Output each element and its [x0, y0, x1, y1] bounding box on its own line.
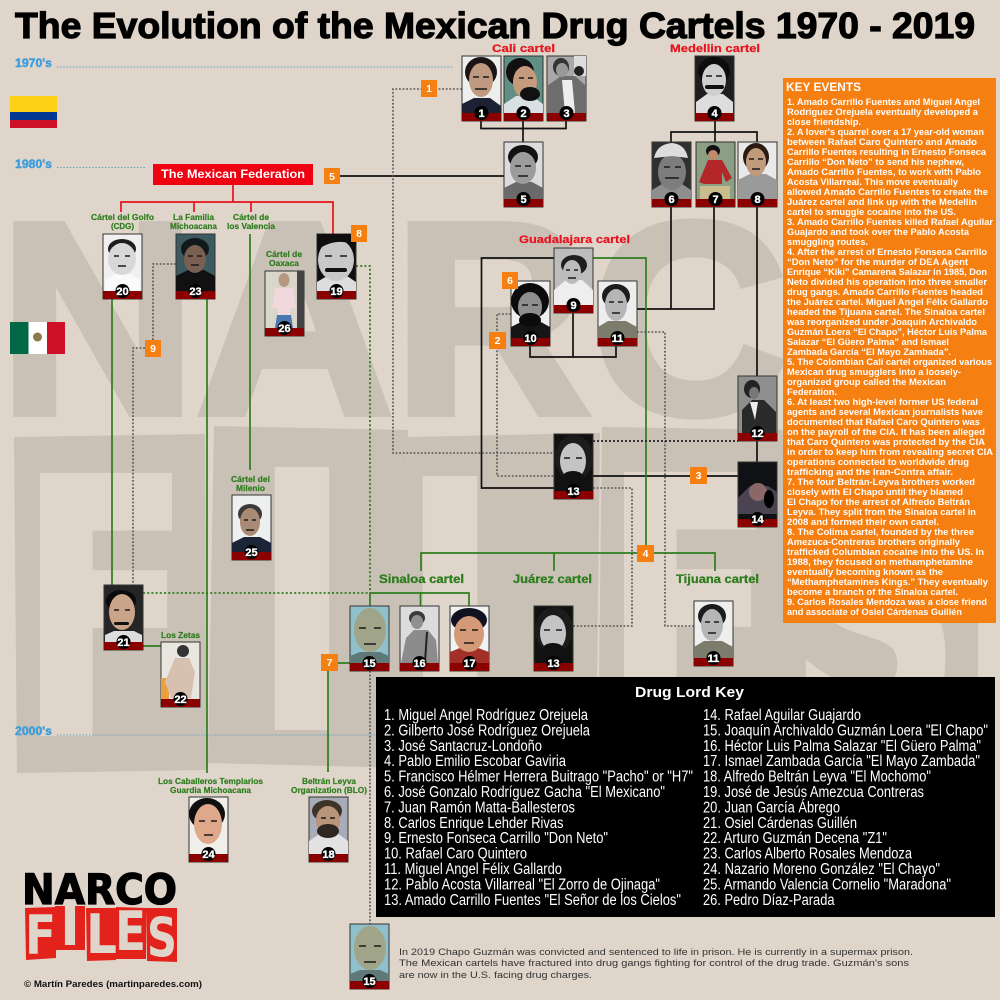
label: La Familia Michoacana: Michoacana — [170, 221, 217, 231]
portrait 7 — [696, 142, 735, 207]
panel: key events: on the payroll of the CIA. It has been alleged — [787, 427, 985, 437]
connector lines: green solid — [112, 234, 715, 773]
panel: drug lord key: 6. José Gonzalo Rodríguez Gacha "El Mexicano" — [384, 784, 665, 801]
portrait 6 — [652, 142, 691, 207]
portrait 17 — [450, 606, 489, 671]
watermark: NARCO FILES: NARCO — [0, 166, 1000, 471]
portrait 12: 12 — [751, 428, 764, 440]
marker 7 — [321, 654, 338, 671]
panel: key events: and associate of Osiel Cárdenas Guillén — [787, 607, 962, 617]
panel: key events: Carrillo Fuentes resulting in Ernesto Fonseca — [787, 147, 986, 157]
portrait 23 — [176, 234, 215, 299]
label: Cartel del Milenio: Milenio — [236, 483, 265, 493]
panel: key events: 8. The Colima cartel, founded by the three — [787, 527, 974, 537]
heading: Tijuana cartel: Tijuana cartel — [676, 574, 759, 586]
label: Cartel de los Valencia: Cártel de — [233, 212, 269, 222]
marker 5 — [324, 168, 340, 184]
panel: drug lord key: 8. Carlos Enrique Lehder Rivas — [384, 815, 564, 832]
logo: NARCO FILES: NARCO — [22, 865, 177, 914]
marker 6: 6 — [507, 275, 513, 287]
portrait 12 — [738, 376, 777, 441]
panel: key events: documented that Rafael Caro Quintero was — [787, 417, 980, 427]
portrait 22: 22 — [174, 694, 187, 706]
marker 1 — [421, 80, 437, 97]
portrait 3 — [547, 56, 586, 121]
panel: key events: Guajardo and took over the Pablo Acosta — [787, 227, 969, 237]
label: Cartel del Milenio — [231, 474, 270, 493]
panel: key events: 4. After the arrest of Ernesto Fonseca Carrillo — [787, 247, 988, 257]
label: Cartel del Golfo: (CDG) — [111, 221, 134, 231]
logo: NARCO FILES: E — [115, 900, 146, 963]
portrait 8 — [738, 142, 777, 207]
panel: drug lord key: 14. Rafael Aguilar Guajardo — [703, 707, 861, 724]
portrait 14: 14 — [751, 514, 764, 526]
label: Beltran Leyva Organization: Organization (BLO) — [291, 785, 367, 795]
portrait 13: 13 — [567, 486, 580, 498]
portrait 16: 16 — [413, 658, 426, 670]
portrait 18 — [309, 797, 348, 862]
panel: drug lord key: 3. José Santacruz-Londoño — [384, 738, 542, 755]
portrait 11 (Tijuana): 11 — [708, 653, 719, 665]
panel: drug lord key: 1. Miguel Angel Rodríguez Orejuela — [384, 707, 588, 724]
label: Cartel de los Valencia — [227, 212, 275, 231]
panel: drug lord key: 4. Pablo Emilio Escobar Gaviria — [384, 753, 566, 770]
portrait 1 — [462, 56, 501, 121]
portrait 20 — [103, 234, 142, 299]
panel: key events: Amado Carrillo Fuentes, to work with Pablo — [787, 167, 982, 177]
credit: © Martín Paredes (martinparedes.com) — [24, 979, 202, 990]
portrait 14 — [738, 462, 777, 527]
panel: key events: KEY EVENTS — [786, 82, 861, 94]
watermark: NARCO FILES: F — [20, 407, 190, 815]
panel: key events: trafficking and the Iran-Contra affair. — [787, 467, 953, 477]
panel: key events: trafficked Columbian cocaine into the US. In — [787, 547, 984, 557]
portrait 22 — [161, 642, 200, 707]
logo: NARCO FILES — [22, 865, 177, 969]
timeline: 1980's — [15, 159, 145, 171]
portrait 19 — [317, 234, 356, 299]
panel: key events: Enrique “Kiki” Camarena Salazar in 1985, Don — [787, 267, 987, 277]
portrait 26: 26 — [278, 323, 291, 335]
panel: key events: Federation. — [787, 387, 837, 397]
The Mexican Federation box: The Mexican Federation — [161, 169, 305, 181]
title: The Evolution of the Mexican Drug Cartels 1970 - 2019 — [15, 5, 975, 46]
panel: key events: closely with El Chapo until they blamed — [787, 487, 963, 497]
heading: Medellin cartel: Medellin cartel — [670, 43, 760, 55]
portrait 23: 23 — [189, 286, 202, 298]
panel: key events: organized group called the Mexican — [787, 377, 946, 387]
panel: drug lord key: 25. Armando Valencia Cornelio "Maradona" — [703, 876, 951, 893]
marker 2: 2 — [495, 335, 501, 347]
marker 9 — [145, 340, 161, 357]
panel: key events: Mexican drug smugglers into a loosely- — [787, 367, 961, 377]
connector lines: red federation tree — [121, 185, 333, 234]
connector lines: dotted — [133, 89, 738, 924]
portrait 15: 15 — [363, 658, 376, 670]
text block: 2019 note: are now in the U.S. facing drug charges. — [399, 970, 592, 980]
watermark: NARCO FILES — [0, 166, 1000, 818]
panel: key events: was reorganized under Joaquín Archivaldo — [786, 317, 978, 327]
text block: 2019 note — [399, 947, 913, 980]
watermark: NARCO FILES: I — [254, 401, 350, 809]
portrait 10 — [511, 281, 550, 346]
icon: Colombian flag — [10, 96, 57, 128]
The Mexican Federation box — [153, 164, 313, 185]
panel: key events — [783, 78, 996, 623]
panel: drug lord key: 23. Carlos Alberto Rosales Mendoza — [703, 846, 912, 863]
connector lines: black solid — [340, 121, 757, 488]
panel: key events: between Rafael Caro Quintero and Amado — [787, 137, 978, 147]
portrait 20: 20 — [116, 286, 129, 298]
label: Los Caballeros Templarios — [158, 776, 263, 795]
label: La Familia Michoacana: La Familia — [173, 212, 214, 222]
portrait 19: 19 — [330, 286, 343, 298]
portrait 18: 18 — [322, 849, 335, 861]
portrait 5: 5 — [520, 194, 527, 206]
label: Cartel del Golfo: Cártel del Golfo — [91, 212, 154, 222]
panel: drug lord key: 19. José de Jesús Amezcua Contreras — [703, 784, 924, 801]
panel: key events: 1. Amado Carrillo Fuentes and Miguel Angel — [787, 97, 980, 107]
label: Cartel del Milenio: Cártel del — [231, 474, 270, 484]
heading: Juarez cartel: Juárez cartel — [513, 574, 592, 586]
icon: Mexican flag — [10, 322, 65, 354]
portrait 15 (2019): 15 — [363, 976, 376, 988]
marker 4 — [637, 545, 654, 562]
panel: key events: Juárez cartel and link up with the Medellin — [787, 197, 977, 207]
panel: key events: 2008 and formed their own cartel. — [787, 517, 939, 527]
panel: key events: 7. The four Beltrán-Leyva brothers worked — [787, 477, 975, 487]
portrait 2 — [504, 56, 543, 121]
logo: NARCO FILES: I — [60, 895, 80, 958]
label: Cartel de Oaxaca: Oaxaca — [269, 258, 299, 268]
portrait 9 — [554, 248, 593, 313]
panel: drug lord key: 12. Pablo Acosta Villarreal "El Zorro de Ojinaga" — [384, 876, 660, 893]
label: La Familia Michoacana — [170, 212, 217, 231]
portrait 3: 3 — [563, 108, 570, 120]
portrait 8: 8 — [754, 194, 761, 206]
panel: key events: close friendship. — [787, 117, 861, 127]
panel: drug lord key: 18. Alfredo Beltrán Leyva "El Mochomo" — [703, 769, 931, 786]
logo: NARCO FILES: S — [147, 906, 177, 969]
text block: 2019 note: In 2019 Chapo Guzmán was convicted and sentenced to life in prison. He is currently in a supermax prison. — [399, 947, 913, 957]
watermark: NARCO FILES: L — [402, 410, 567, 818]
panel: drug lord key: 24. Nazario Moreno González "El Chayo" — [703, 861, 940, 878]
label: Beltran Leyva Organization — [291, 776, 367, 795]
portrait 10: 10 — [524, 333, 537, 345]
marker 6 — [502, 272, 518, 289]
portrait 1: 1 — [478, 108, 485, 120]
panel: key events: eventually becoming known as the — [787, 567, 943, 577]
portrait 26 — [265, 271, 304, 336]
heading: Cali cartel: Cali cartel — [492, 43, 555, 55]
panel: key events: 9. Carlos Rosales Mendoza was a close friend — [787, 597, 987, 607]
panel: drug lord key: 20. Juan García Ábrego — [703, 799, 840, 816]
panel: key events: 3. Amado Carrillo Fuentes killed Rafael Aguilar — [787, 217, 994, 227]
panel: key events: Zambada García “El Mayo Zambada”. — [787, 347, 951, 357]
timeline: 2000's: 2000's — [15, 726, 52, 738]
panel: key events: Acosta Villarreal. This move eventually — [787, 177, 958, 187]
panel: key events: 6. At least two high-level former US federal — [787, 397, 978, 407]
panel: key events: 2. A lover's quarrel over a 17 year-old woman — [787, 127, 984, 137]
heading: Sinaloa cartel: Sinaloa cartel — [379, 574, 464, 586]
portrait 15 (2019) — [350, 924, 389, 989]
portrait 2: 2 — [520, 108, 527, 120]
marker 9: 9 — [150, 343, 156, 355]
panel: key events: operations connected to worldwide drug — [787, 457, 969, 467]
marker 2 — [489, 332, 506, 349]
portrait 24: 24 — [202, 849, 215, 861]
label: Beltran Leyva Organization: Beltrán Leyva — [302, 776, 356, 786]
portrait 11: 11 — [612, 333, 623, 345]
label: Cartel de los Valencia: los Valencia — [227, 221, 275, 231]
label: Los Caballeros Templarios: Guardia Michoacana — [170, 785, 251, 795]
portrait 24 — [189, 797, 228, 862]
panel: key events: agents and several Mexican journalists have — [787, 407, 983, 417]
portrait 6: 6 — [668, 194, 675, 206]
panel: key events: become a branch of the Sinaloa cartel. — [787, 587, 958, 597]
panel: key events: that Caro Quintero was protected by the CIA — [787, 437, 986, 447]
timeline: 1980's: 1980's — [15, 159, 52, 171]
portrait 11 — [598, 281, 637, 346]
marker 3 — [690, 467, 707, 484]
panel: drug lord key: 10. Rafael Caro Quintero — [384, 846, 527, 863]
panel: drug lord key: 9. Ernesto Fonseca Carrillo "Don Neto" — [384, 830, 608, 847]
logo: NARCO FILES: F — [25, 904, 56, 967]
panel: drug lord key: 7. Juan Ramón Matta-Ballesteros — [384, 799, 575, 816]
text block: 2019 note: The Mexican cartels have fractured into drug gangs fighting for control of the drug trade. Guzmán's sons — [399, 958, 910, 968]
portrait 21 — [104, 585, 143, 650]
label: Cartel de Oaxaca: Cártel de — [266, 249, 302, 259]
panel: drug lord key: 11. Miguel Angel Félix Gallardo — [384, 861, 562, 878]
portrait 4: 4 — [711, 108, 718, 120]
panel: drug lord key: 5. Francisco Hélmer Herrera Buitrago "Pacho" or "H7" — [384, 769, 693, 786]
panel: key events: 1988, they focused on methamphetamine — [787, 557, 973, 567]
panel: key events: the Juárez cartel. Miguel Angel Félix Gallardo — [787, 297, 989, 307]
panel: key events: “Don Neto” for the murder of DEA Agent — [787, 257, 968, 267]
panel: key events: smuggling routes. — [787, 237, 868, 247]
panel: key events: cartel to smuggle cocaine into the US. — [787, 207, 956, 217]
portrait 9: 9 — [570, 300, 577, 312]
portrait 7: 7 — [712, 194, 719, 206]
portrait 5 — [504, 142, 543, 207]
timeline: 1970's: 1970's — [15, 58, 52, 70]
marker 8 — [351, 225, 367, 242]
panel: drug lord key: Drug Lord Key — [635, 684, 745, 701]
marker 8: 8 — [356, 228, 362, 240]
panel: key events: allowed Amado Carrillo Fuentes to create the — [787, 187, 988, 197]
marker 4: 4 — [643, 548, 649, 560]
panel: key events: Amezuca-Contreras brothers originally — [787, 537, 960, 547]
watermark: NARCO FILES: E — [604, 406, 774, 814]
marker 3: 3 — [696, 470, 702, 482]
panel: key events: Rodríguez Orejuela eventually developed a — [787, 107, 978, 117]
portrait 25 — [232, 495, 271, 560]
label: Los Zetas: Los Zetas — [161, 630, 200, 640]
panel: drug lord key: 13. Amado Carrillo Fuentes "El Señor de los Cielos" — [384, 892, 681, 909]
panel: key events: drug gangs. Amado Carrillo Fuentes headed — [787, 287, 983, 297]
portrait 16 — [400, 606, 439, 671]
panel: key events: “Methamphetamines Kings.” They eventually — [787, 577, 988, 587]
panel: key events: Leyva. They split from the Sinaloa cartel in — [787, 507, 976, 517]
portrait 13 (Juarez): 13 — [547, 658, 560, 670]
portrait 15 — [350, 606, 389, 671]
panel: key events: 5. The Colombian Cali cartel organized various — [787, 357, 992, 367]
panel: drug lord key — [376, 677, 995, 917]
logo: NARCO FILES: L — [86, 903, 117, 966]
panel: key events: Carrillo “Don Neto” to send his nephew, — [787, 157, 964, 167]
portrait 13 — [554, 434, 593, 499]
panel: key events: in order to keep him from revealing secret CIA — [787, 447, 994, 457]
label: Cartel de Oaxaca — [266, 249, 302, 268]
panel: drug lord key: 26. Pedro Díaz-Parada — [703, 892, 835, 909]
portrait 17: 17 — [463, 658, 476, 670]
panel: drug lord key: 22. Arturo Guzmán Decena "Z1" — [703, 830, 887, 847]
portrait 21: 21 — [117, 637, 130, 649]
portrait 11 (Tijuana) — [694, 601, 733, 666]
portrait 13 (Juarez) — [534, 606, 573, 671]
panel: key events: Guzmán Loera “El Chapo”, Héctor Luis Palma — [787, 327, 987, 337]
marker 1: 1 — [426, 83, 432, 95]
panel: key events: headed the Tijuana cartel. The Sinaloa cartel — [787, 307, 985, 317]
heading: Guadalajara cartel: Guadalajara cartel — [519, 234, 630, 246]
label: Cartel del Golfo — [91, 212, 154, 231]
label: Los Caballeros Templarios: Los Caballeros Templarios — [158, 776, 263, 786]
marker 7: 7 — [327, 657, 333, 669]
panel: key events: Salazar “El Güero Palma” and Ismael — [787, 337, 949, 347]
panel: drug lord key: 2. Gilberto José Rodríguez Orejuela — [384, 722, 590, 739]
portrait 4 — [695, 56, 734, 121]
panel: drug lord key: 21. Osiel Cárdenas Guillén — [703, 815, 857, 832]
panel: key events: El Chapo for the arrest of Alfredo Beltrán — [787, 497, 970, 507]
portrait 25: 25 — [245, 547, 258, 559]
panel: key events: Neto divided his operation into three smaller — [787, 277, 988, 287]
marker 5: 5 — [329, 171, 335, 183]
